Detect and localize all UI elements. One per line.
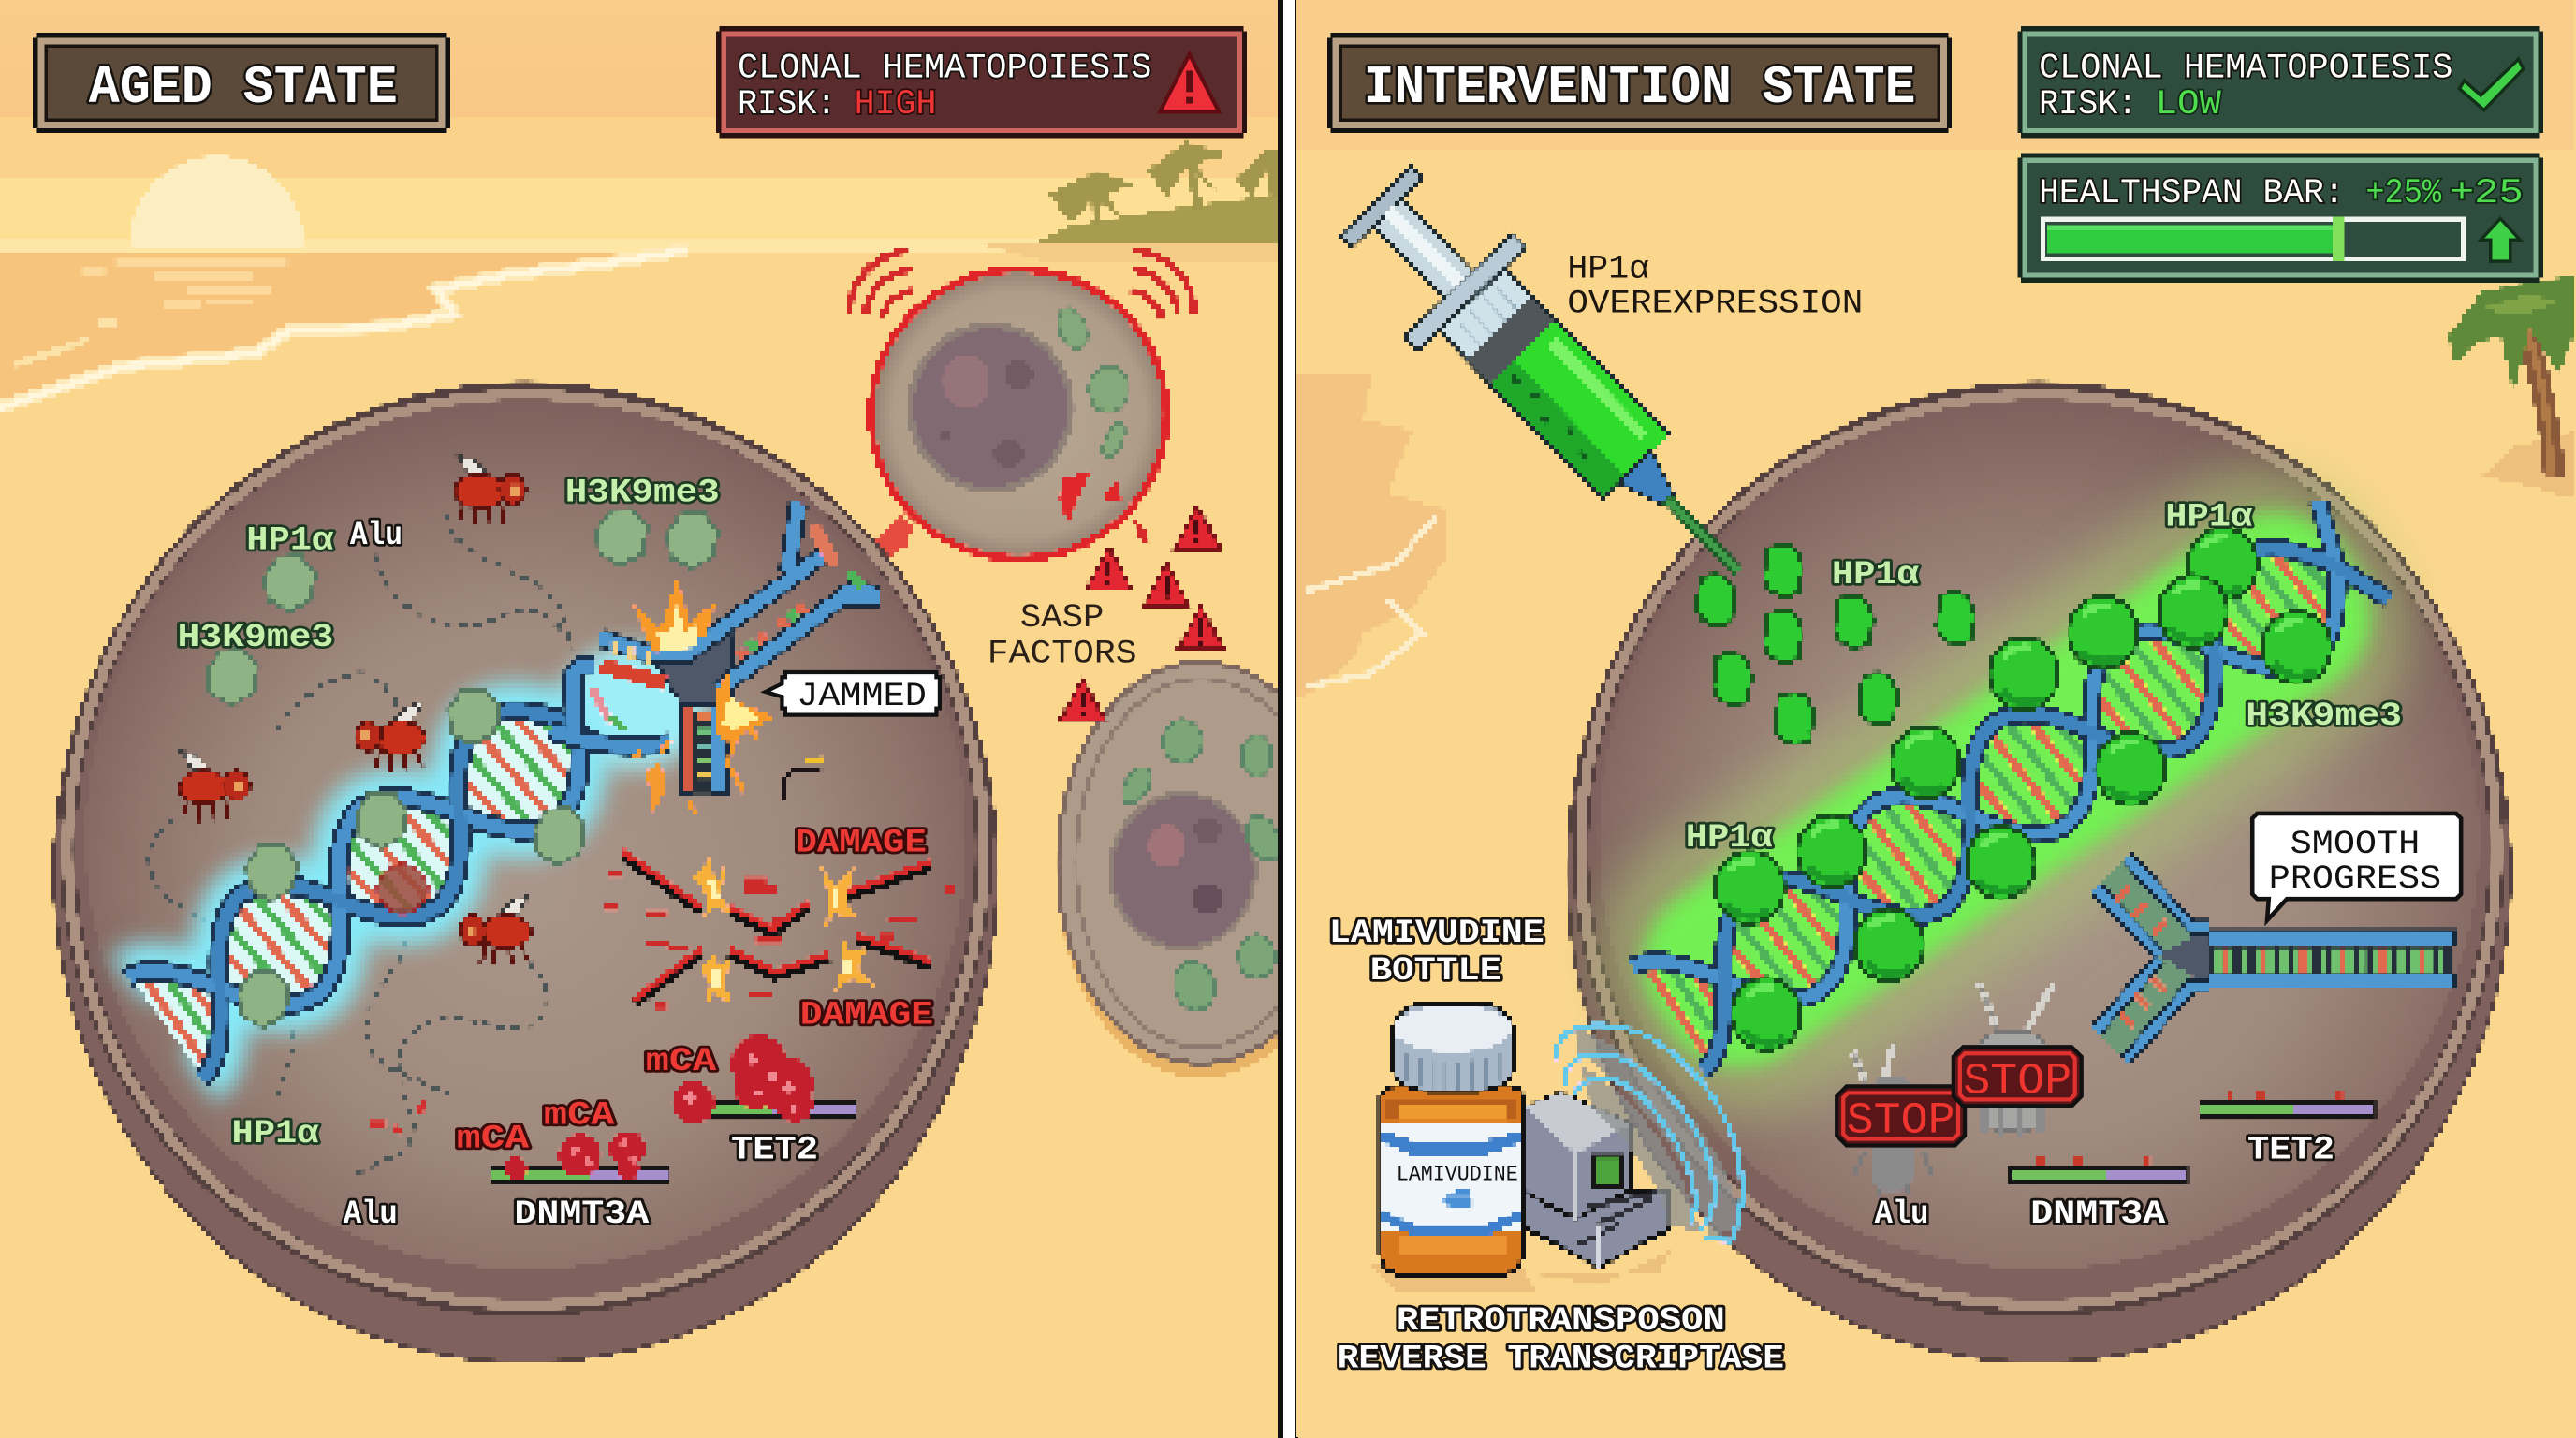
cyan halo near the fork [559, 644, 707, 770]
clonal hematopoiesis risk high badge: CLONAL HEMATOPOIESIS [738, 50, 1151, 89]
label Alu: Alu [1875, 1196, 1928, 1233]
label mCA DNMT3A right: mCA [544, 1097, 616, 1135]
icon: check mark [2459, 59, 2524, 110]
clonal hematopoiesis risk high badge: HIGH [855, 85, 936, 125]
intervention state heading badge [1327, 33, 1952, 133]
stop sign upper: STOP [1963, 1057, 2071, 1107]
label mCA TET2: mCA [646, 1043, 717, 1080]
smooth replication fork [2097, 857, 2454, 1060]
HP1 alpha bound to helix [238, 689, 585, 1027]
SASP warning triangles [1060, 506, 1224, 722]
label HP1 alpha: HP1α [246, 521, 334, 559]
label TET2: TET2 [2247, 1132, 2334, 1169]
aged scene artwork [0, 0, 1344, 1438]
label retrotransposon reverse transcriptase: REVERSE TRANSCRIPTASE [1338, 1340, 1784, 1377]
label TET2: TET2 [731, 1132, 818, 1169]
clonal hematopoiesis risk low badge: RISK: [2039, 85, 2137, 125]
senescent cell with red alarm arcs [849, 250, 1194, 562]
label mCA DNMT3A left: mCA [457, 1120, 530, 1157]
intervention scene artwork [1296, 0, 2576, 1438]
red specks [372, 1101, 424, 1132]
label SASP factors: FACTORS [988, 635, 1137, 672]
label HP1 alpha lower: HP1α [1686, 819, 1774, 857]
lamivudine bottle [1372, 1005, 1536, 1290]
stabilized DNA helix [1631, 499, 2393, 1071]
right nucleus [1567, 383, 2510, 1362]
label HP1 alpha overexpression [1567, 251, 1863, 323]
clonal hematopoiesis risk low badge: CLONAL HEMATOPOIESIS [2039, 50, 2452, 89]
stop sign lower: STOP [1847, 1096, 1955, 1146]
label Alu lower: Alu [344, 1196, 398, 1233]
DNMT3A mutated bar with mCA clumps [491, 1131, 668, 1185]
island with palm trees [970, 141, 1278, 263]
label H3K9me3: H3K9me3 [2246, 697, 2402, 735]
label DNMT3A: DNMT3A [2030, 1196, 2166, 1233]
smooth progress callout [2252, 814, 2461, 920]
label Alu: Alu [350, 517, 402, 554]
label HP1 alpha overexpression: HP1α [1567, 251, 1649, 288]
free HP1 alpha droplets [1697, 545, 1975, 744]
DNA damage breaks [605, 851, 956, 1005]
beach background [1296, 0, 2576, 1438]
label lamivudine bottle [1329, 915, 1544, 990]
label retrotransposon reverse transcriptase [1338, 1302, 1784, 1377]
debris [785, 770, 822, 799]
healthspan bar badge: HEALTHSPAN BAR: [2039, 174, 2345, 213]
icon: warning triangle [1160, 54, 1219, 111]
left nucleus [54, 383, 997, 1362]
silenced retrotransposon bugs [1853, 983, 2054, 1196]
intervention state heading badge: INTERVENTION STATE [1364, 58, 1915, 119]
healthspan bar badge: +25% [2365, 174, 2442, 213]
aged state heading badge [33, 33, 450, 133]
clonal hematopoiesis risk high badge [716, 26, 1247, 138]
stop sign upper [1954, 1047, 2082, 1107]
label HP1 alpha upper: HP1α [2165, 499, 2253, 536]
clonal hematopoiesis risk low badge: LOW [2156, 85, 2222, 125]
label H3K9me3 left: H3K9me3 [178, 619, 333, 656]
label on bottle: LAMIVUDINE [1397, 1162, 1518, 1186]
label lamivudine bottle: LAMIVUDINE [1329, 915, 1544, 952]
panel: intervention state [1296, 0, 2576, 1438]
sun [131, 154, 304, 248]
jammed callout [766, 672, 940, 715]
label HP1 alpha droplets: HP1α [1832, 556, 1920, 594]
icon: up arrow [2481, 218, 2520, 261]
healthspan bar badge [2017, 153, 2543, 283]
glowing damaged DNA helix [127, 677, 615, 1078]
smooth progress callout: SMOOTH [2291, 826, 2420, 863]
HP1 alpha blobs on aged chromatin [207, 509, 718, 705]
Alu retrotransposon dashed strands [149, 513, 572, 1180]
helix upper end [550, 666, 670, 746]
label DAMAGE lower: DAMAGE [800, 997, 933, 1034]
beach background [0, 0, 1278, 1438]
label HP1 alpha lower: HP1α [231, 1115, 320, 1152]
label SASP factors: SASP [1020, 599, 1104, 637]
label DNMT3A: DNMT3A [514, 1196, 650, 1233]
palm tree [2448, 276, 2576, 477]
neighbouring cell [1058, 660, 1278, 1077]
intervention labels [1329, 251, 2461, 1377]
reverse transcriptase computer [1525, 1093, 1673, 1285]
label H3K9me3 top: H3K9me3 [565, 474, 720, 511]
jammed callout: JAMMED [797, 678, 927, 715]
DNMT3A restored bar [2009, 1155, 2188, 1185]
healthspan progress bar [2041, 217, 2466, 261]
clonal hematopoiesis risk low badge [2017, 26, 2543, 138]
explosion sparks at fork [633, 579, 825, 815]
healthspan bar badge: +25 [2450, 174, 2524, 213]
red clump on helix [378, 864, 427, 914]
label lamivudine bottle: BOTTLE [1370, 952, 1501, 990]
syringe [1322, 148, 1793, 624]
label SASP factors [988, 599, 1137, 672]
TET2 restored bar [2198, 1092, 2376, 1121]
green glow along DNA [1546, 417, 2461, 1167]
TET2 mutated bar with mCA clumps [672, 1035, 857, 1124]
jammed replication fork [600, 503, 881, 794]
label HP1 alpha overexpression: OVEREXPRESSION [1567, 286, 1863, 323]
label DAMAGE upper: DAMAGE [795, 824, 927, 861]
aged red ants [179, 455, 531, 966]
stop sign lower [1837, 1086, 1965, 1146]
aged state heading badge: AGED STATE [89, 58, 398, 119]
signal waves [1557, 1025, 1742, 1240]
clonal hematopoiesis risk high badge: RISK: [738, 85, 836, 125]
sea and shoreline [0, 250, 688, 407]
HP1 alpha bound to helix [1715, 527, 2331, 1050]
label retrotransposon reverse transcriptase: RETROTRANSPOSON [1397, 1302, 1725, 1340]
smooth progress callout: PROGRESS [2269, 860, 2441, 898]
aged state labels [178, 474, 1137, 1233]
divider [1278, 0, 1298, 1438]
